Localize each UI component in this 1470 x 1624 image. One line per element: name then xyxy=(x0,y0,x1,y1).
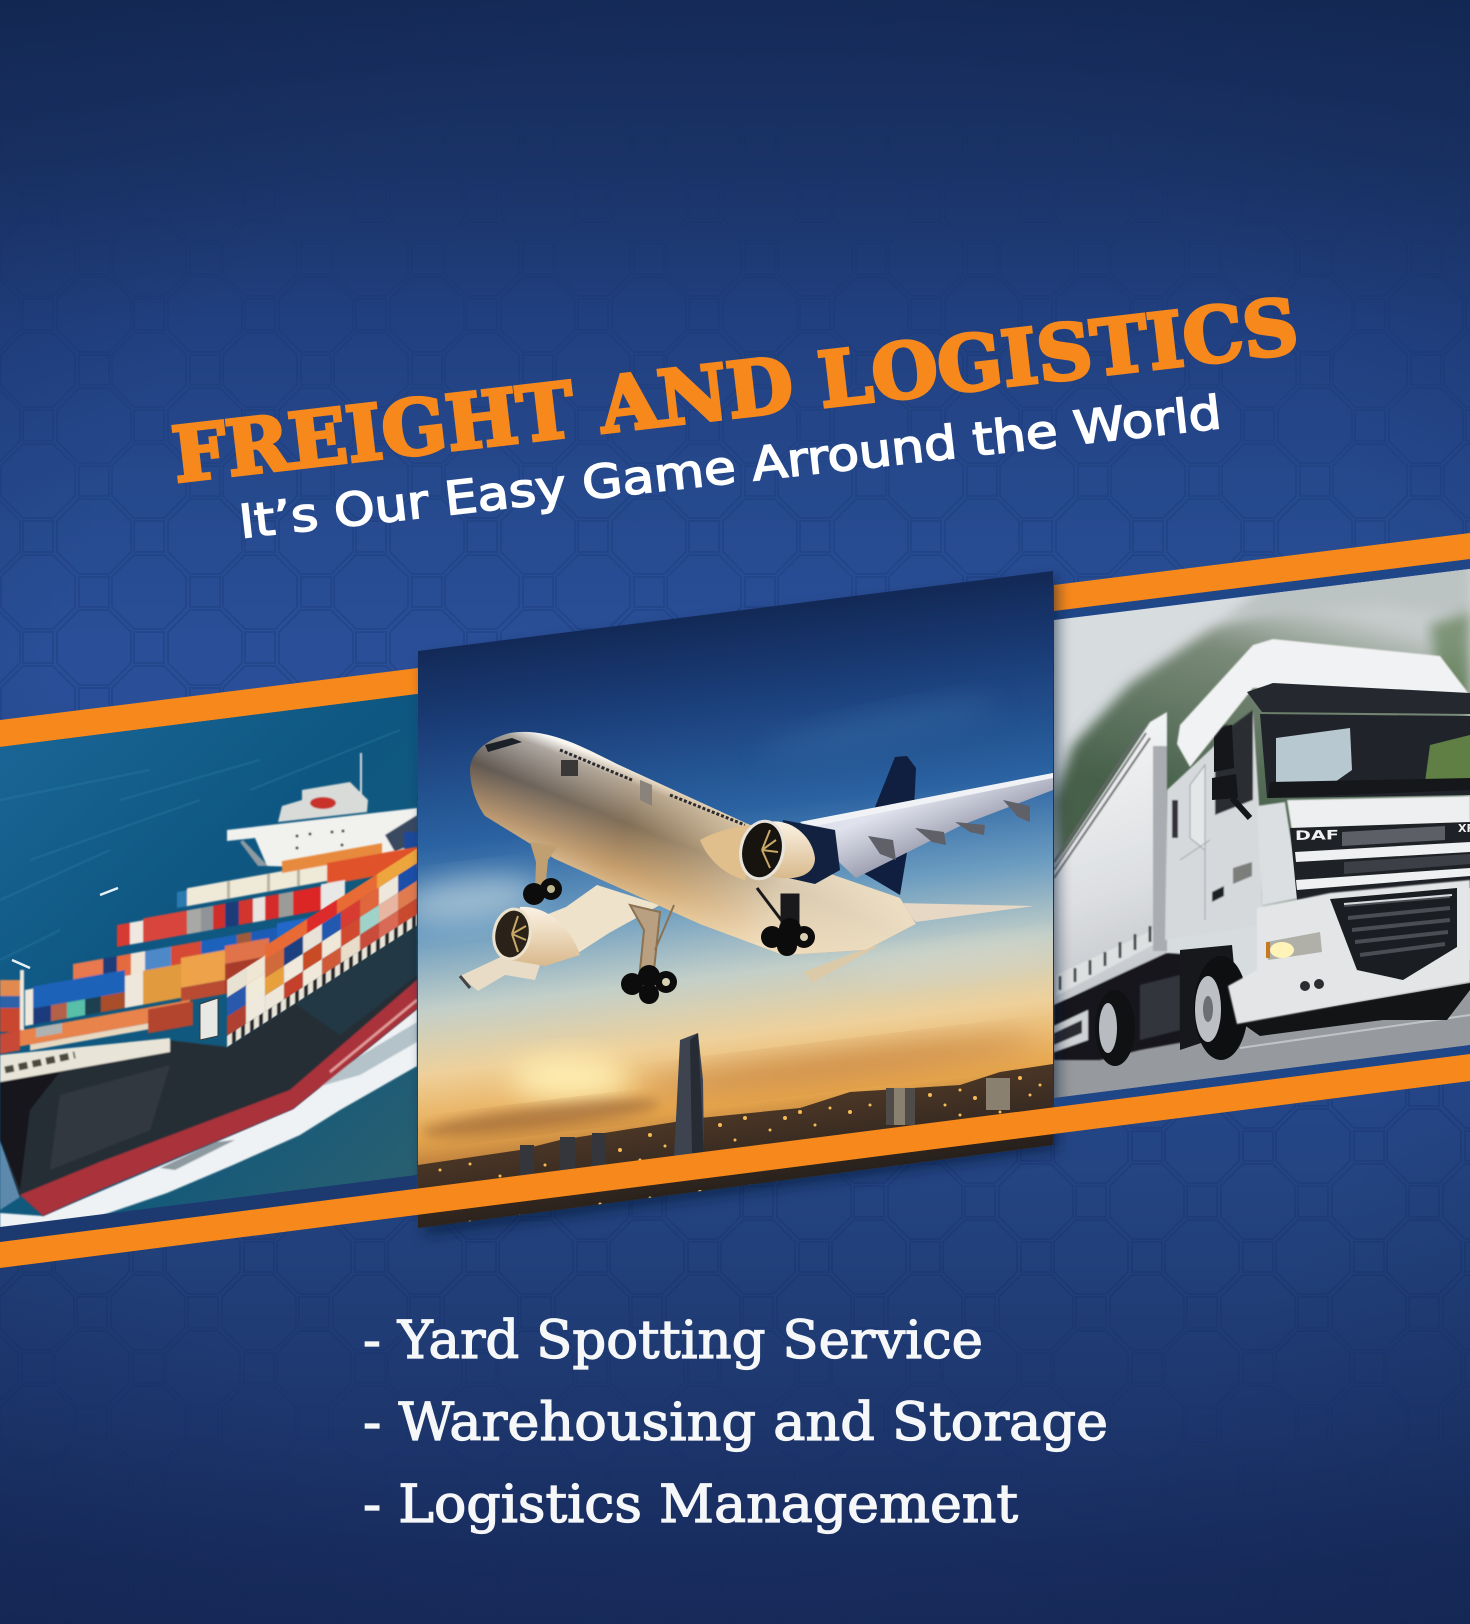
grille xyxy=(1290,822,1470,900)
fuselage xyxy=(470,732,916,955)
bumper xyxy=(1228,880,1470,1024)
hull xyxy=(0,920,417,1216)
service: warehousing: - Warehousing and Storage xyxy=(363,1393,1108,1453)
mirrors xyxy=(1212,725,1250,818)
containers: front tiers xyxy=(0,837,417,1060)
DAF logo: DAF xyxy=(1295,828,1339,844)
headlight xyxy=(1266,932,1322,960)
tail fin xyxy=(864,756,916,895)
near wing xyxy=(460,885,660,991)
subtitle: It’s Our Easy Game Arround the World xyxy=(236,385,1224,549)
lower air intake xyxy=(1330,888,1457,980)
upper orange band: right segment xyxy=(1054,533,1470,620)
lower orange band xyxy=(0,1045,1470,1268)
service: yard spotting: - Yard Spotting Service xyxy=(363,1311,983,1371)
photo panel: container ship xyxy=(0,690,420,1232)
sun visor xyxy=(1247,683,1470,714)
title: FREIGHT AND LOGISTICS xyxy=(168,281,1303,500)
city skyline xyxy=(418,1033,1053,1235)
crane ladder on deck xyxy=(200,998,218,1040)
containers: side stacks xyxy=(227,849,417,1047)
plane panel shadow xyxy=(424,578,1058,1236)
photo panel: truck on mountain road xyxy=(1050,555,1470,1110)
services list xyxy=(363,1311,1108,1535)
front wheels xyxy=(1180,945,1470,1060)
ship bridge superstructure xyxy=(227,753,417,868)
sea xyxy=(0,690,420,1230)
left engine xyxy=(490,906,580,966)
photo panel: airplane at sunset xyxy=(398,565,1071,1235)
trailer rear wheel xyxy=(1095,990,1135,1066)
sky and mountain xyxy=(1050,555,1470,1110)
trailer xyxy=(1054,712,1180,1061)
service: logistics management: - Logistics Management xyxy=(363,1475,1018,1535)
roof spoiler xyxy=(1177,639,1470,767)
far wing xyxy=(800,773,1053,878)
windshield xyxy=(1260,714,1470,798)
cab front panels xyxy=(1257,796,1470,905)
landing gear xyxy=(523,842,815,1004)
sunset sky xyxy=(398,565,1071,1235)
fog lamps xyxy=(1300,979,1324,991)
wake foam xyxy=(0,1009,417,1232)
truck cab side xyxy=(1165,710,1262,940)
upper orange band: left segment xyxy=(0,668,418,747)
horizontal stabilizers xyxy=(804,903,1034,983)
road xyxy=(1054,960,1470,1100)
right engine xyxy=(700,817,840,884)
